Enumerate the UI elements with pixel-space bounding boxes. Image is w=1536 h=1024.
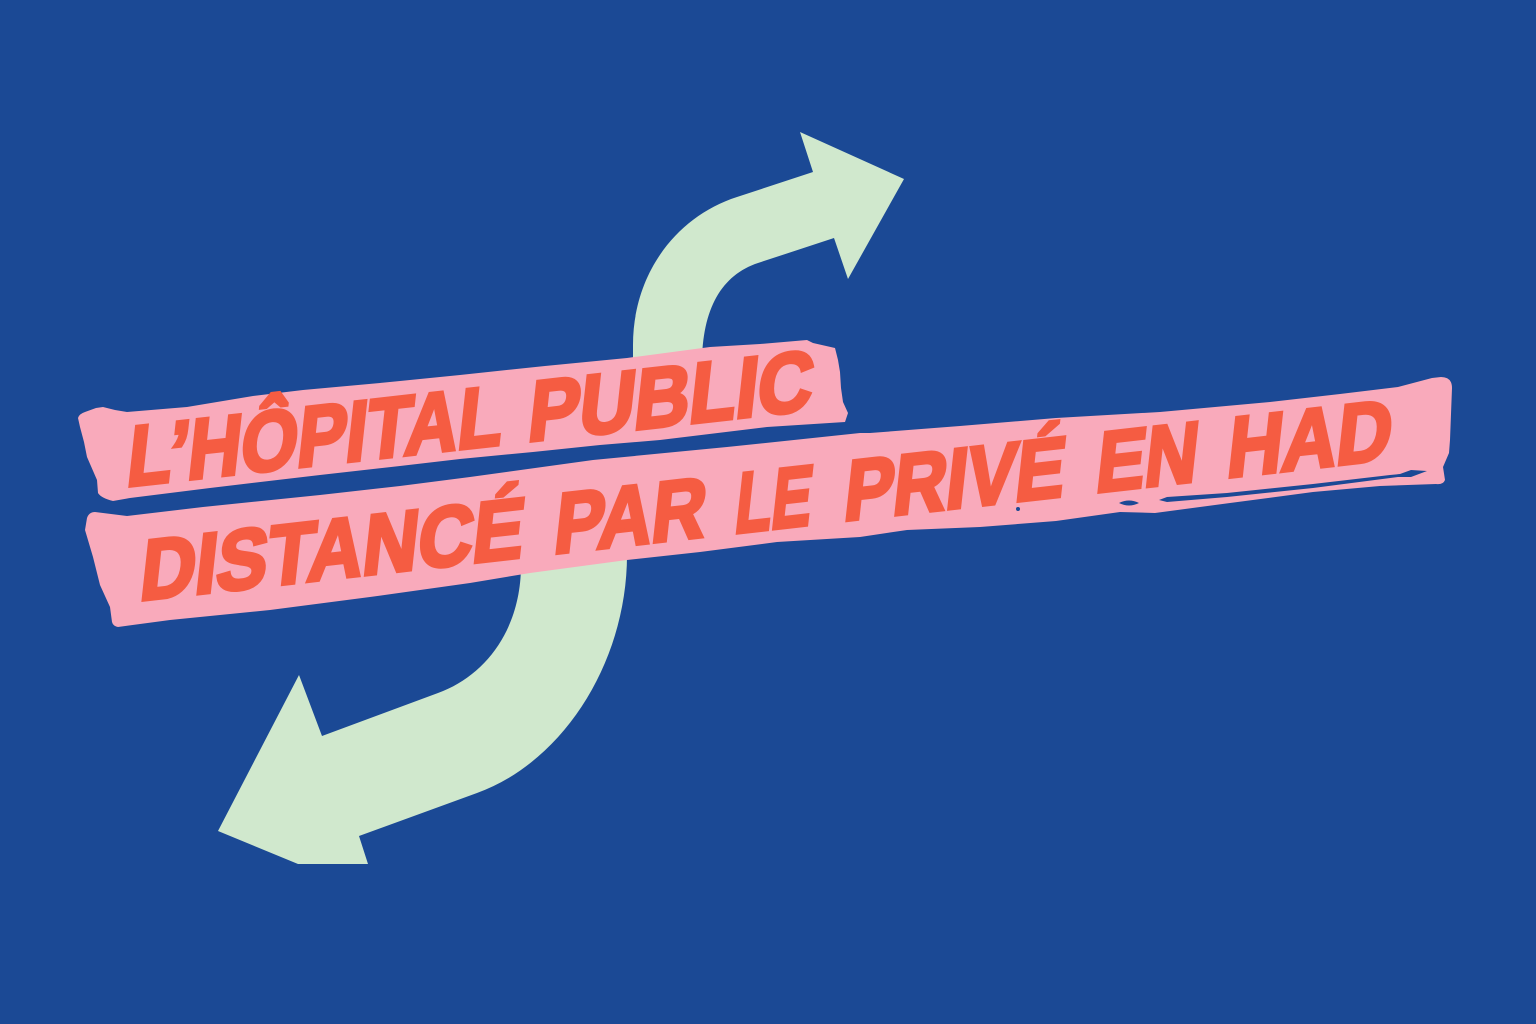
arrow: pointing down left <box>218 545 627 864</box>
arrow: pointing up right <box>633 132 904 375</box>
word: PUBLIC: PUBLIC <box>524 333 819 460</box>
ribbon: top line <box>78 340 848 501</box>
word: EN: EN <box>1092 404 1204 511</box>
word: PRIVÉ: PRIVÉ <box>840 418 1071 540</box>
word: LE: LE <box>731 448 818 552</box>
word: L'HÔPITAL: L’HÔPITAL <box>123 367 509 505</box>
word: PAR: PAR <box>550 460 712 572</box>
title line 2 <box>136 381 1398 619</box>
title line 1 <box>123 332 819 505</box>
word: HAD: HAD <box>1223 382 1398 496</box>
ribbon: bottom line <box>85 377 1452 627</box>
word: DISTANCÉ: DISTANCÉ <box>136 480 530 619</box>
icon: S-shaped double arrow <box>218 132 904 864</box>
